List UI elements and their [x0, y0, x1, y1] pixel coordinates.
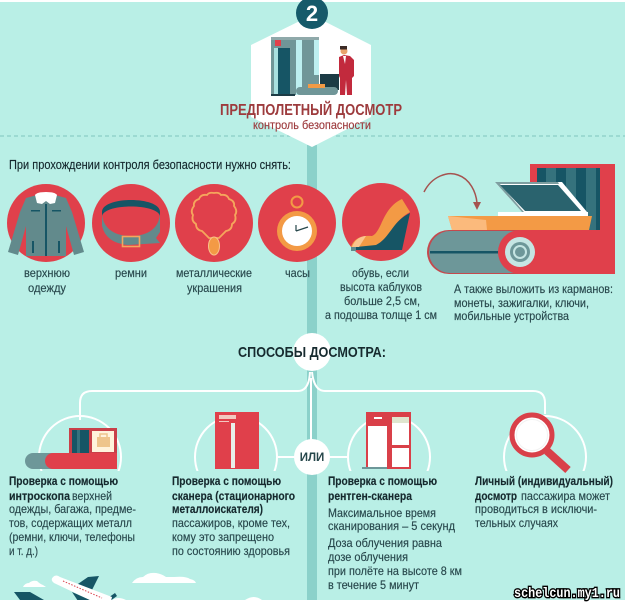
- title: ПРЕДПОЛЕТНЫЙ ДОСМОТР: [220, 101, 402, 119]
- bottom clouds: [112, 597, 262, 600]
- text: pockets note: монеты, зажигалки, ключи,: [454, 296, 589, 310]
- icon: x-ray conveyor: [427, 164, 615, 274]
- icon: introscope: [25, 428, 117, 469]
- text: pockets note: мобильные устройства: [454, 309, 569, 323]
- heading badge: [293, 333, 331, 371]
- text: introscope check: (ремни, ключи, телефоны: [9, 530, 135, 544]
- text: scanner check: по состоянию здоровья: [172, 544, 290, 558]
- text: introscope check: верхней: [72, 489, 112, 503]
- item: watch: часы: [285, 266, 310, 280]
- icon: large cloud: [132, 573, 196, 583]
- text: scanner check: металлоискателя): [172, 504, 263, 516]
- text: scanner check: кому это запрещено: [172, 530, 274, 544]
- item: belts: ремни: [115, 266, 147, 280]
- item: shoes: высота каблуков: [340, 280, 422, 294]
- item: jewellery: [175, 184, 253, 295]
- text: personal check: тельных случаях: [475, 516, 558, 530]
- text: scanner check: сканера (стационарного: [172, 491, 295, 503]
- item: watch: [258, 184, 336, 280]
- icon: metal detector: [215, 412, 259, 469]
- item: belts: [92, 184, 170, 280]
- item: outerwear: [7, 184, 85, 295]
- subtitle: контроль безопасности: [253, 118, 371, 132]
- panel: header hexagon: [251, 15, 371, 147]
- item: shoes: [325, 183, 437, 322]
- icon: airplane: [52, 576, 117, 601]
- icon: magnifier: [512, 415, 568, 470]
- text: introscope check: Проверка с помощью: [9, 476, 118, 488]
- step number badge: 2: [306, 1, 318, 26]
- icon: security gate with officer: [271, 37, 354, 96]
- text: personal check: досмотр: [475, 491, 517, 503]
- icon: curved arrow: [424, 174, 481, 210]
- item: shoes: обувь, если: [352, 266, 409, 280]
- text: pockets note: [454, 282, 613, 323]
- text: x-ray scanner check: рентген-сканера: [328, 491, 413, 503]
- text: personal check: проводиться в исключи-: [475, 502, 597, 516]
- text: scanner check: Проверка с помощью: [172, 476, 281, 488]
- item: jewellery: металлические: [176, 266, 252, 280]
- or badge: ИЛИ: [300, 452, 324, 464]
- connector lines: [39, 372, 586, 498]
- icon: second airplane tail: [14, 592, 44, 600]
- text: x-ray scanner check: в течение 5 минут: [328, 578, 419, 592]
- text: personal check: пассажира может: [521, 489, 610, 503]
- text: introscope check: интроскопа: [9, 491, 71, 503]
- or badge: [294, 439, 330, 475]
- icon: x-ray scanner: [362, 412, 411, 469]
- text: introscope check: одежды, багажа, предме-: [9, 502, 136, 516]
- item: outerwear: одежду: [28, 281, 66, 295]
- text: x-ray scanner check: [328, 476, 462, 592]
- text: x-ray scanner check: при полёте на высоте 8 км: [328, 564, 462, 578]
- text: x-ray scanner check: сканирования – 5 секунд: [328, 519, 455, 533]
- item: shoes: больше 2,5 см,: [344, 294, 420, 308]
- text: x-ray scanner check: Максимальное время: [328, 506, 436, 520]
- text: introscope check: тов, содержащих металл: [9, 516, 132, 530]
- icon: small cloud: [23, 581, 46, 587]
- background mask below the icon circles: [0, 471, 307, 531]
- step number badge: [296, 0, 328, 29]
- text: x-ray scanner check: дозе облучения: [328, 550, 408, 564]
- text: scanner check: [172, 476, 295, 558]
- item: shoes: а подошва толще 1 см: [325, 308, 437, 322]
- text: introscope check: и т. д.): [9, 544, 38, 558]
- text: introscope check: [9, 476, 136, 558]
- heading: inspection methods: СПОСОБЫ ДОСМОТРА:: [238, 344, 386, 361]
- text: personal check: [475, 476, 613, 530]
- item: jewellery: украшения: [187, 281, 242, 295]
- intro text: При прохождении контроля безопасности нужно снять:: [9, 158, 291, 172]
- item: outerwear: верхнюю: [24, 266, 70, 280]
- text: scanner check: пассажиров, кроме тех,: [172, 516, 290, 530]
- text: x-ray scanner check: Проверка с помощью: [328, 476, 437, 488]
- text: x-ray scanner check: Доза облучения равна: [328, 536, 442, 550]
